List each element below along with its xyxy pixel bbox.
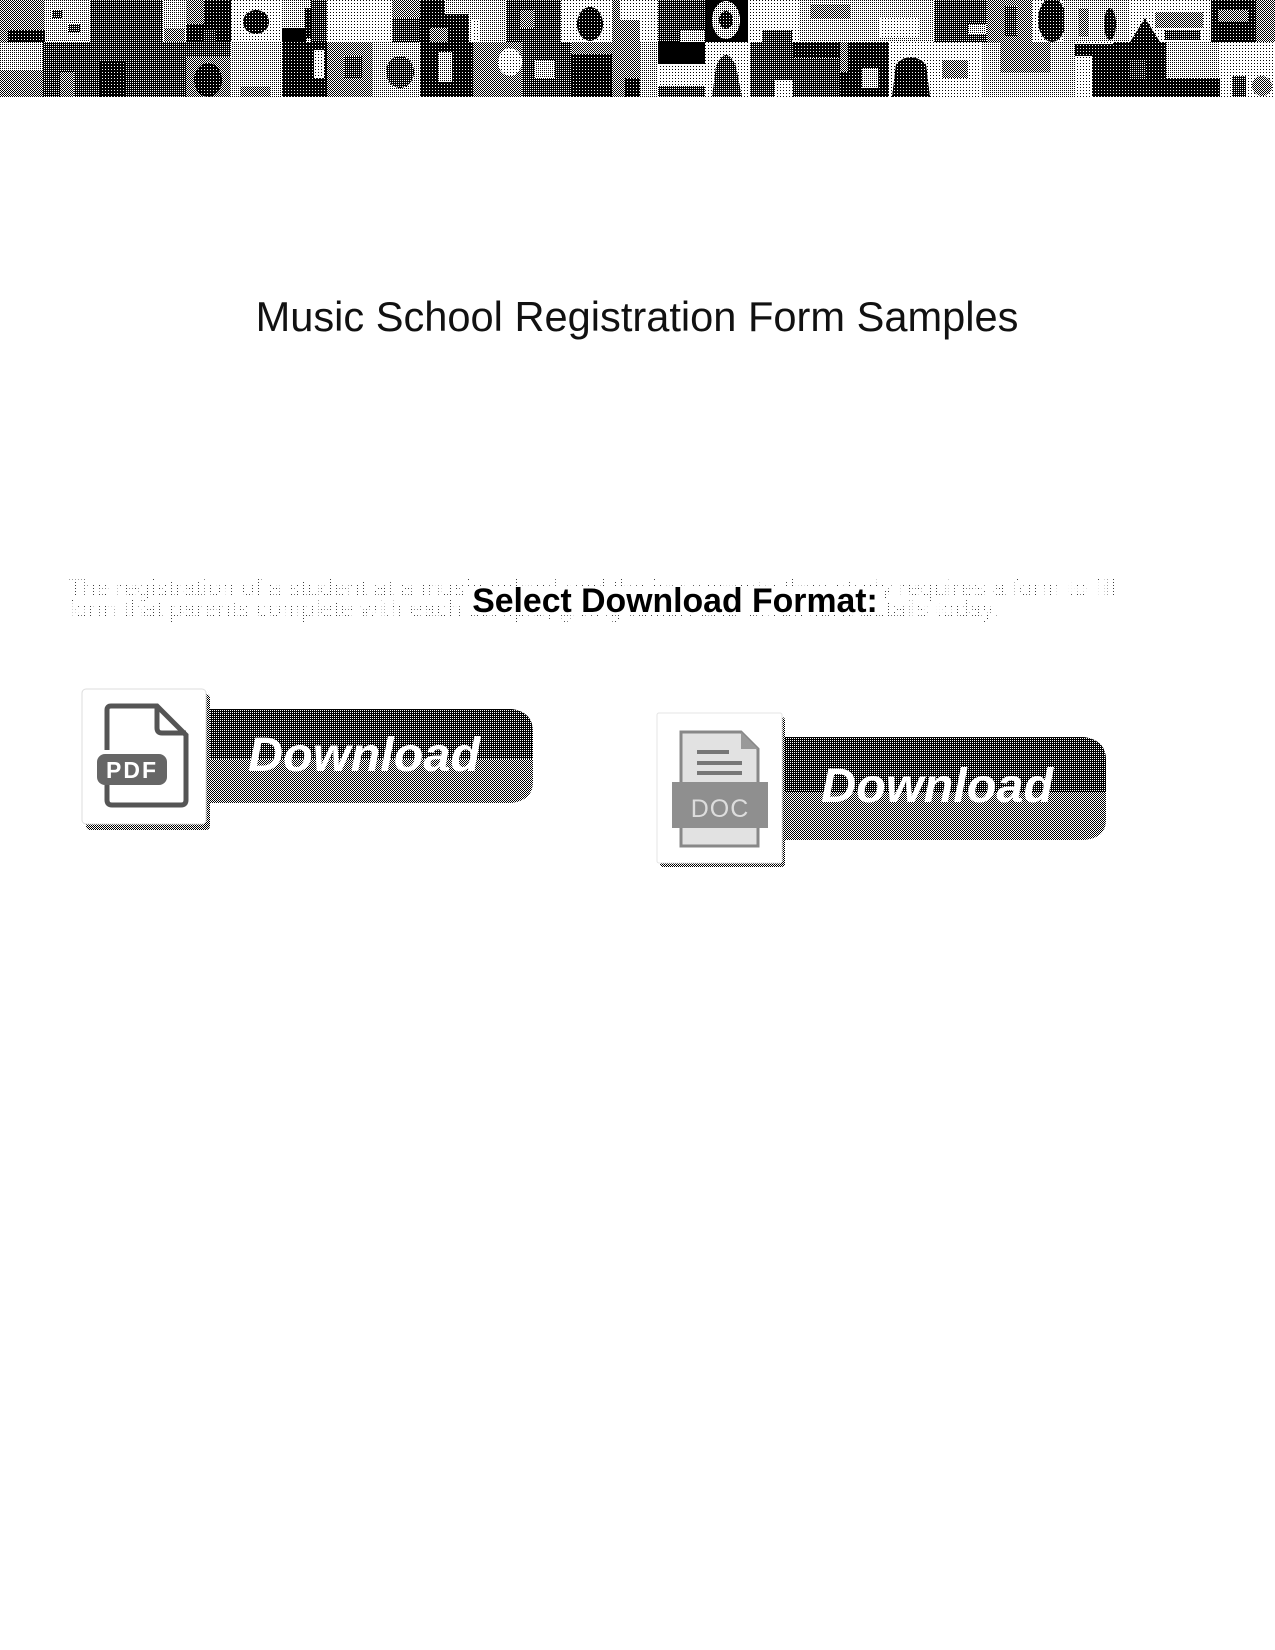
banner: mosaic of album-style thumbnails — [0, 0, 1275, 97]
icon: PDF file — [97, 706, 186, 805]
document card — [657, 713, 785, 867]
document card — [82, 689, 210, 830]
heading: select download format: Select Download Format: — [472, 582, 878, 620]
download bar — [205, 709, 535, 803]
faint background paragraph — [68, 575, 1117, 623]
download bar — [780, 737, 1110, 840]
icon: DOC file — [672, 732, 768, 846]
icon: PDF file: PDF — [106, 757, 158, 783]
download bar: Download — [821, 759, 1054, 813]
download bar: Download — [248, 728, 481, 782]
button: DOC download — [657, 713, 1110, 867]
button: PDF download — [82, 689, 535, 830]
title: Music School Registration Form Samples — [256, 293, 1018, 340]
faint background paragraph: The registration of a student at a music school and the instruments they study requires a form to fill — [68, 575, 1117, 602]
icon: DOC file: DOC — [691, 795, 749, 823]
faint background paragraph: form that parents complete with each sample, giving tuition and enrolment details today. — [68, 596, 999, 623]
